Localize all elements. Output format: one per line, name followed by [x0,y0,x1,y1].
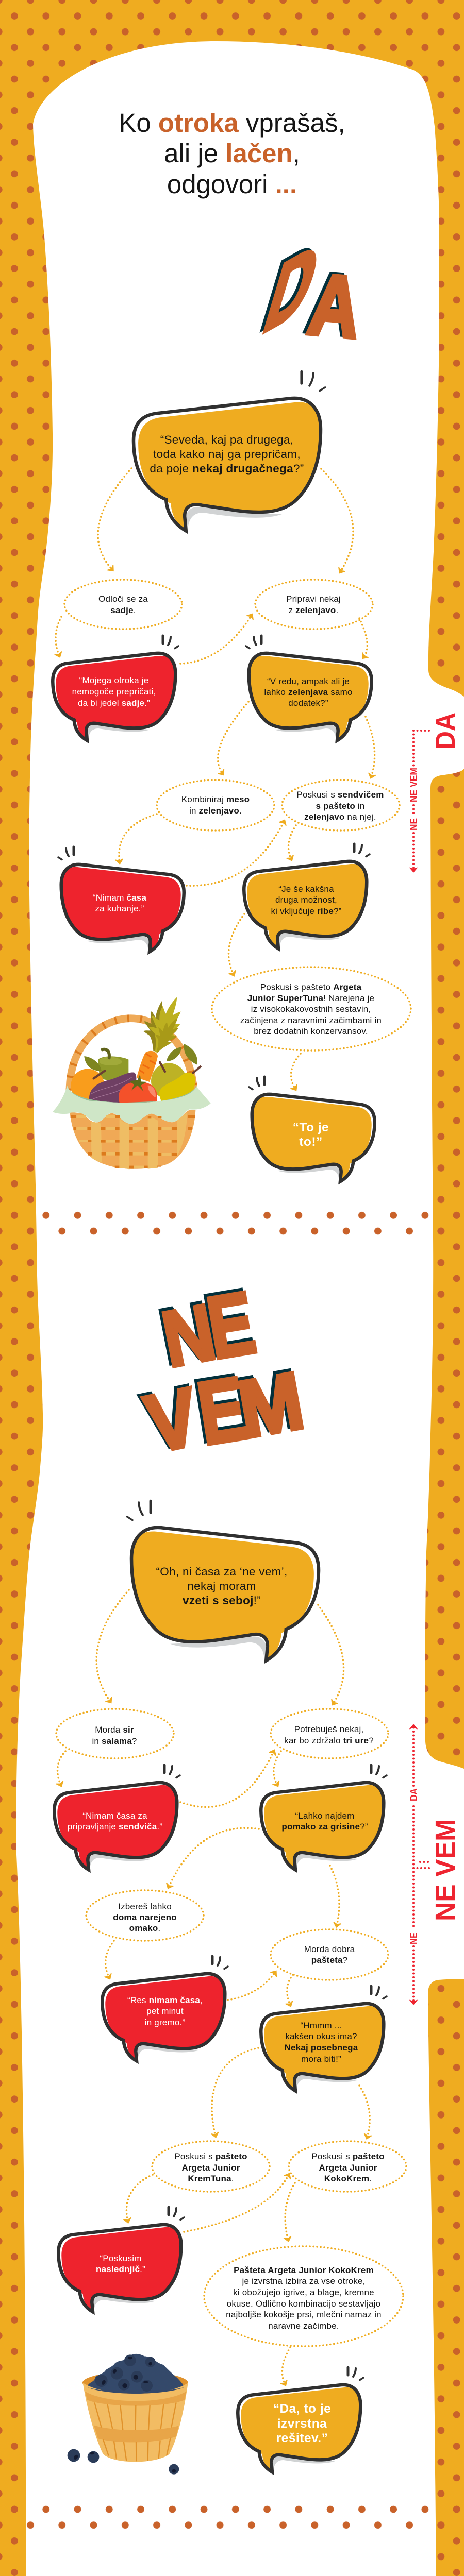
option: Morda sir in salama: Morda sir [95,1725,134,1735]
heading: NE [257,2562,368,2576]
option: Izbereš lahko doma narejeno omako: doma narejeno [113,1912,177,1922]
bubble: To je to [249,1077,375,1184]
bubble: Res nimam časa: pet minut [146,2006,184,2016]
bubble: Mojega otroka: “Mojega otroka je [79,675,148,685]
bubble: Lahko najdem pomako za grisine: pomako za grisine?” [281,1822,368,1832]
option: Pašteta Argeta Junior KokoKrem description: okuse. Odlično kombinacijo sestavljajo [227,2299,380,2309]
option: Morda dobra pašteta: pašteta? [311,1955,347,1965]
option: Izbereš lahko doma narejeno omako: Izbereš lahko [118,1902,172,1911]
bubble: Da, to je izvrstna rešitev: “Da, to je [273,2402,331,2416]
bubble: Lahko najdem pomako za grisine: “Lahko najdem [295,1811,355,1821]
heading: DA [252,219,367,356]
side nav: DA tab: NE VEM [409,768,420,802]
side nav: DA tab: NE [409,818,420,831]
bubble: Hmmm kakšen okus ima: kakšen okus ima? [285,2031,357,2041]
heading: DA: A [303,256,367,356]
bubble: Poskusim naslednjič: “Poskusim [100,2253,142,2263]
option: Pašteta Argeta Junior KokoKrem description: ki obožujejo igrive, a blage, kremne [233,2287,374,2297]
heading: NE VEM: E [201,1274,261,1378]
side nav: NE VEM tab: DA [409,1788,420,1801]
option: Argeta Junior KokoKrem: Argeta Junior [319,2163,377,2173]
side nav: NE VEM tab: NE [409,1933,420,1944]
bubble: Res nimam časa: “Res nimam časa, [127,1995,203,2005]
bubble: To je to: to!” [299,1135,323,1149]
option: Odloči se za sadje: sadje. [110,605,136,615]
option: Pašteta Argeta Junior KokoKrem description [204,2246,403,2346]
bubble: Da, to je izvrstna rešitev: rešitev.” [276,2431,328,2445]
heading: NE VEM: E [188,1355,250,1461]
option: Kombiniraj meso in zelenjavo: Kombiniraj meso [181,794,250,804]
bubble: Res nimam časa: in gremo.” [145,2018,185,2027]
option: Potrebuješ nekaj, kar bo zdržalo tri ure: kar bo zdržalo tri ure? [284,1736,374,1745]
bubble: V redu, ampak: dodatek?” [288,698,328,708]
option: Morda sir in salama [56,1709,174,1758]
option: Argeta Junior KokoKrem: Poskusi s pašteto [311,2151,385,2161]
heading: NE VEM: E [198,1271,258,1375]
heading: NE VEM: E [191,1358,253,1463]
option: Argeta Junior SuperTuna: Junior SuperTuna! Narejena je [247,993,374,1003]
side nav: DA tab [409,713,461,871]
bubble: Poskusim naslednjič [58,2207,184,2314]
option: Argeta Junior KremTuna [152,2141,270,2192]
bubble: Lahko najdem pomako za grisine [261,1765,387,1872]
flow arrows: DA section [56,468,375,1089]
option: Pašteta Argeta Junior KokoKrem description: najboljše kokošje prsi, mlečni namaz in [226,2310,382,2319]
option: Odloči se za sadje [64,580,182,629]
bubble: Oh, ni časa za ne vem [127,1501,319,1665]
option: Poskusi s sendvičem: zelenjavo na njej. [304,812,376,822]
bubble: Oh, ni časa za ne vem: nekaj moram [187,1580,256,1592]
bubble: V redu, ampak: “V redu, ampak ali je [267,676,350,686]
option: Potrebuješ nekaj, kar bo zdržalo tri ure [271,1709,388,1758]
bubble: Je še kakšna druga možnost: ki vključuje ribe?” [271,906,342,916]
bubble: V redu, ampak [246,636,372,743]
side nav: NE VEM tab [409,1726,461,2003]
illustration: basket of fruit and vegetables [53,991,211,1169]
bubble: Je še kakšna druga možnost: “Je še kakšna [278,884,334,894]
bubble: Oh, ni časa za ne vem: “Oh, ni časa za ‘ne vem’, [156,1565,288,1578]
option: Potrebuješ nekaj, kar bo zdržalo tri ure: Potrebuješ nekaj, [294,1724,363,1734]
option: Poskusi s sendvičem [282,780,400,831]
bubble: Nimam časa za kuhanje: “Nimam časa [93,893,146,903]
option: Argeta Junior SuperTuna: iz visokokakovostnih sestavin, [251,1004,371,1014]
bubble: Mojega otroka: nemogoče prepričati, [72,687,156,697]
bubble: Hmmm kakšen okus ima: mora biti!” [301,2054,341,2064]
bubble: Nimam časa za pripravljanje sendviča [54,1765,180,1872]
heading: NE VEM: M [233,1355,310,1455]
option: Morda dobra pašteta [271,1929,388,1980]
title: Ko otroka vprašaš, [119,108,345,138]
option: Morda dobra pašteta: Morda dobra [304,1944,355,1954]
option: Pripravi nekaj z zelenjavo [255,580,373,629]
bubble: Seveda, kaj pa drugega [134,371,325,535]
bubble: Je še kakšna druga možnost [244,844,370,951]
heading: DA: D [254,221,330,354]
option: Kombiniraj meso in zelenjavo: in zelenjavo. [189,806,242,816]
option: Izbereš lahko doma narejeno omako [86,1890,204,1941]
bubble: Mojega otroka [53,636,178,743]
title [119,108,345,199]
bubble: Hmmm kakšen okus ima [261,1986,387,2093]
option: Pripravi nekaj z zelenjavo: Pripravi nekaj [286,594,341,604]
option: Morda sir in salama: in salama? [92,1736,137,1746]
option: Argeta Junior KokoKrem: KokoKrem. [324,2174,372,2183]
dotted divider between DA and NE VEM [0,1211,464,1235]
bubble: Oh, ni časa za ne vem: vzeti s seboj!” [183,1594,261,1607]
heading: DA: D [252,219,328,352]
option: Argeta Junior KremTuna: Argeta Junior [181,2163,240,2173]
bubble: Nimam časa za pripravljanje sendviča: “Nimam časa za [82,1811,147,1821]
heading: NE VEM: N [156,1288,222,1384]
bubble: Nimam časa za pripravljanje sendviča: pripravljanje sendviča.” [68,1822,162,1832]
option: Argeta Junior KremTuna: KremTuna. [188,2174,234,2183]
heading: NE VEM: M [229,1353,307,1452]
dotted divider between NE VEM and NE [0,2505,464,2529]
heading: NE VEM: V [136,1369,203,1468]
bubble: Nimam časa za kuhanje [58,847,184,954]
bubble: Da, to je izvrstna rešitev: izvrstna [277,2417,327,2431]
flow arrows: NE VEM section [58,1590,370,2384]
bubble: Hmmm kakšen okus ima: Nekaj posebnega [285,2043,358,2053]
option: Pripravi nekaj z zelenjavo: z zelenjavo. [289,605,338,615]
bubble: Res nimam časa [102,1956,228,2063]
option: Argeta Junior KokoKrem [289,2141,406,2192]
title: odgovori ... [167,170,297,199]
heading: NE VEM [136,1271,310,1470]
bubble: Nimam časa za kuhanje: za kuhanje.” [95,904,144,913]
bubble: Poskusim naslednjič: naslednjič.” [96,2264,145,2274]
bubble: Hmmm kakšen okus ima: “Hmmm ... [300,2021,342,2030]
side nav: DA tab: DA [430,713,461,750]
bubble: Seveda, kaj pa drugega: da poje nekaj drugačnega?” [150,462,304,475]
illustration: basket of blueberries [68,2354,188,2475]
title: ali je lačen, [164,139,300,168]
bubble: Mojega otroka: da bi jedel sadje.” [78,698,150,708]
option: Poskusi s sendvičem: s pašteto in [316,801,365,811]
option: Argeta Junior SuperTuna: Poskusi s pašteto Argeta [260,982,362,992]
option: Kombiniraj meso in zelenjavo [157,780,274,831]
option: Argeta Junior SuperTuna: brez dodatnih konzervansov. [254,1026,368,1036]
bubble: V redu, ampak: lahko zelenjava samo [264,687,353,697]
option: Argeta Junior KremTuna: Poskusi s pašteto [174,2151,247,2161]
option: Pašteta Argeta Junior KokoKrem description: Pašteta Argeta Junior KokoKrem [234,2265,374,2275]
option: Poskusi s sendvičem: Poskusi s sendvičem [296,790,384,800]
option: Pašteta Argeta Junior KokoKrem description: je izvrstna izbira za vse otroke, [241,2276,366,2286]
heading: NE VEM: N [153,1285,219,1381]
side nav: NE VEM tab: NE VEM [430,1819,461,1921]
bubble: Je še kakšna druga možnost: druga možnost, [275,895,337,905]
bubble: Seveda, kaj pa drugega: “Seveda, kaj pa drugega, [160,433,293,446]
bubble: To je to: “To je [293,1121,329,1134]
heading: NE VEM: V [139,1371,206,1470]
option: Argeta Junior SuperTuna: začinjena z naravnimi začimbami in [240,1015,382,1025]
option: Argeta Junior SuperTuna [212,967,411,1050]
option: Izbereš lahko doma narejeno omako: omako. [129,1923,160,1933]
bubble: Seveda, kaj pa drugega: toda kako naj ga prepričam, [153,448,301,461]
bubble: Da, to je izvrstna rešitev [238,2367,363,2475]
heading: DA: A [301,254,364,354]
option: Pašteta Argeta Junior KokoKrem description: naravne začimbe. [268,2321,339,2331]
option: Odloči se za sadje: Odloči se za [98,594,148,604]
